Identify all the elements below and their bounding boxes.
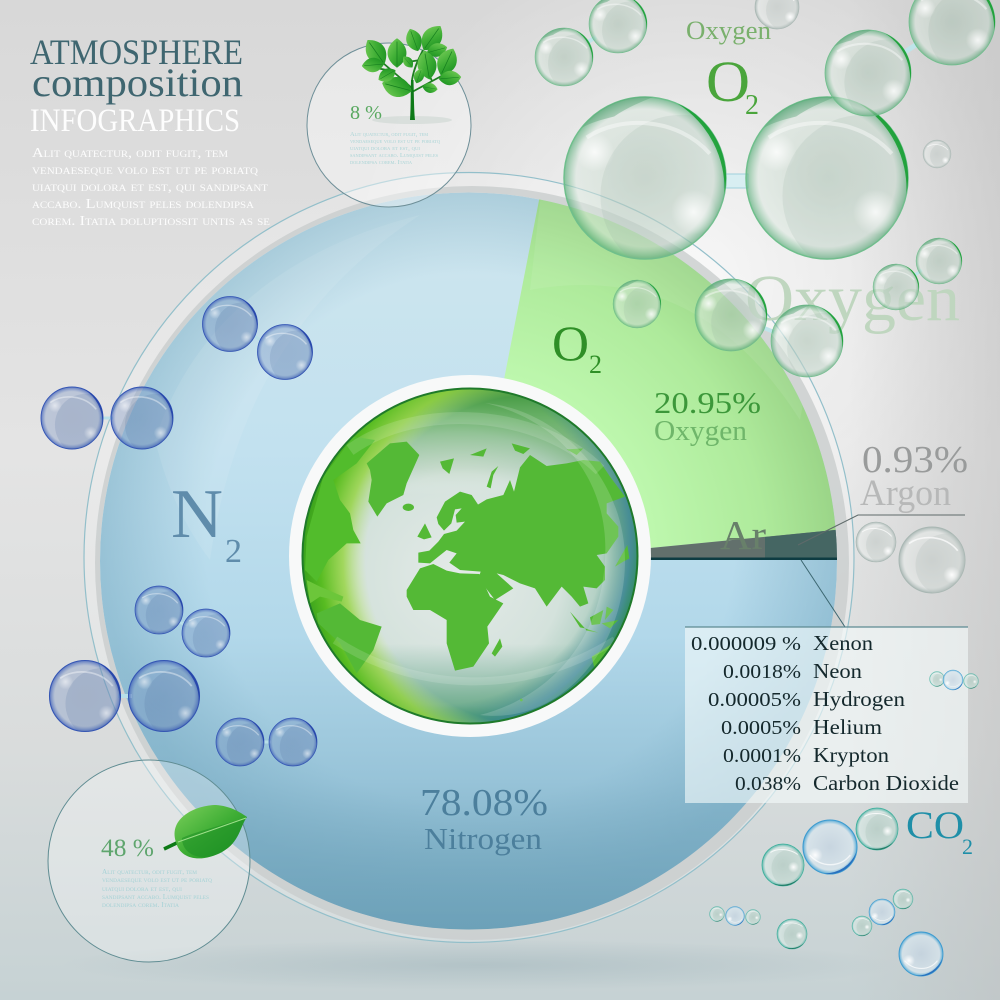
- bubbles: oxygen molecule top right: [825, 0, 1000, 125]
- Australia: [592, 644, 612, 667]
- label: top Oxygen heading: Oxygen: [686, 16, 771, 45]
- pie segment: oxygen 20.95%: [504, 200, 836, 548]
- intro paragraph: corem. Itatia doluptiossit untis as se: [32, 213, 271, 228]
- gas names: [813, 631, 959, 795]
- Greenland: [367, 442, 419, 517]
- small text: Alit quatectur, odit fugit, tem: [350, 132, 428, 138]
- bubbles: oxygen molecule top left: [535, 0, 660, 92]
- bubbles: small trio right: [852, 889, 916, 936]
- white globe ring: [289, 375, 651, 737]
- label: top O2: O: [706, 49, 750, 114]
- Svalbard: [440, 458, 454, 474]
- value: 48%: 48 %: [101, 835, 154, 862]
- bubbles: oxygen molecule right: [873, 238, 972, 315]
- grey band: [95, 186, 849, 940]
- bubbles: carbon dioxide molecule: [762, 808, 903, 887]
- intro paragraph: accabo. Lumquist peles dolendipsa: [32, 196, 255, 211]
- Central America: [307, 580, 343, 603]
- percentages: 0.0001%: [723, 745, 801, 767]
- intro paragraph: Alit quatectur, odit fugit, tem: [32, 145, 228, 160]
- table: trace gases: [685, 627, 968, 803]
- small text: [102, 869, 212, 909]
- bubbles: small trio lower: [710, 906, 762, 926]
- small text: [350, 132, 440, 166]
- South America: [317, 603, 382, 673]
- small text: sandipsant accabo. Lumquist peles: [350, 153, 438, 159]
- percentages: 0.0005%: [721, 717, 801, 739]
- intro paragraph: [32, 145, 271, 228]
- title line 2: composition: [32, 60, 243, 105]
- globe rim: [302, 388, 638, 724]
- gas names: Carbon Dioxide: [813, 771, 959, 795]
- Japan: [615, 545, 629, 567]
- small text: dolendipsa corem. Itatia: [102, 902, 179, 909]
- label: 0.93% Argon: Argon: [860, 473, 951, 514]
- small text: sandipsant accabo. Lumquist peles: [102, 894, 209, 901]
- title block: [30, 32, 271, 228]
- bubbles: nitrogen molecule 4: [50, 660, 215, 739]
- small text: uiatqui dolora et est, qui: [350, 146, 421, 152]
- pie segment: argon 0.93%: [640, 530, 840, 560]
- percentages: 0.038%: [735, 773, 801, 795]
- label: Ar: Ar: [720, 512, 766, 558]
- Africa: [407, 564, 503, 671]
- bubble: small grey: [923, 140, 957, 169]
- label: 20.95% Oxygen: 20.95%: [654, 385, 761, 420]
- North America: [305, 437, 375, 582]
- bubble: green in wedge: [613, 280, 672, 333]
- bubbles: nitrogen molecule 3: [135, 586, 241, 662]
- label: wedge O2: O: [552, 315, 589, 371]
- argon leader line: [798, 515, 965, 545]
- label: N2: [171, 476, 242, 570]
- icon: tree: [360, 21, 462, 124]
- Novaya Zemlya: [487, 466, 498, 488]
- bubbles: large oxygen molecule: [564, 97, 944, 277]
- outer thin ring: [84, 172, 854, 942]
- label: 0.93% Argon: 0.93%: [862, 439, 968, 481]
- gas names: Krypton: [813, 743, 890, 767]
- bubble: single blue: [899, 932, 943, 976]
- Madagascar: [492, 638, 502, 657]
- panel: atmosphere pie chart: [84, 150, 854, 942]
- heading: oxygen ghost word: Oxygen: [745, 262, 960, 335]
- bubbles: nitrogen molecule 5: [216, 718, 328, 771]
- gas names: Helium: [813, 715, 882, 739]
- percentages: 0.0018%: [723, 661, 801, 683]
- small text: uiatqui dolora et est, qui: [102, 886, 182, 893]
- bubble: single teal: [777, 919, 811, 950]
- label: CO2: [906, 804, 973, 859]
- bubbles: nitrogen molecule 2: [41, 387, 187, 456]
- gas names: Xenon: [813, 631, 874, 655]
- percentages: [691, 633, 801, 795]
- gas names: Neon: [813, 659, 863, 683]
- label: 20.95% Oxygen: [654, 385, 761, 447]
- bubbles: nitrogen molecule 1: [202, 296, 325, 386]
- label: 78.08% Nitrogen: [420, 782, 548, 856]
- label: CO2: CO: [906, 804, 964, 847]
- small text: dolendipsa corem. Itatia: [350, 160, 412, 166]
- pie edge shading: [100, 192, 837, 930]
- bubbles: oxygen molecule on pie edge: [695, 279, 859, 385]
- label: 20.95% Oxygen: Oxygen: [654, 416, 747, 447]
- percentages: 0.00005%: [708, 689, 801, 711]
- small text: Alit quatectur, odit fugit, tem: [102, 869, 198, 876]
- UK and Ireland: [417, 523, 432, 539]
- label: 0.93% Argon: [860, 439, 968, 514]
- continents: [305, 437, 629, 701]
- panel: tree 8% callout: [307, 21, 471, 207]
- bubbles: argon: [856, 522, 978, 596]
- bubble: top centre: [755, 0, 808, 31]
- globe: [289, 375, 651, 737]
- label: 78.08% Nitrogen: 78.08%: [420, 782, 548, 824]
- intro paragraph: vendaeseque volo est ut pe poriatq: [32, 162, 259, 177]
- icon: leaf: [164, 805, 247, 858]
- label: N2: N: [171, 476, 223, 553]
- small text: vendaeseque volo est ut pe poriatq: [102, 877, 212, 884]
- title line 1: ATMOSPHERE: [30, 32, 243, 72]
- gas names: Hydrogen: [813, 687, 906, 711]
- percentages: 0.000009 %: [691, 633, 801, 655]
- intro paragraph: uiatqui dolora et est, qui sandipsant: [32, 179, 269, 194]
- label: N2: 2: [225, 533, 242, 570]
- title line 3: INFOGRAPHICS: [30, 103, 240, 139]
- label: wedge O2: 2: [589, 350, 602, 379]
- label: 78.08% Nitrogen: Nitrogen: [424, 821, 543, 856]
- Iceland: [403, 504, 414, 511]
- panel: leaf 48% callout: [48, 760, 250, 962]
- label: top O2: 2: [745, 90, 759, 121]
- Eurasia: [418, 455, 625, 607]
- bubbles: tiny trio in table: [930, 670, 980, 690]
- label: wedge O2: [552, 315, 602, 379]
- value: 8%: 8 %: [350, 102, 382, 124]
- glass arcs: [335, 403, 625, 716]
- label: CO2: 2: [962, 834, 973, 859]
- pie segment: nitrogen 78.08%: [100, 192, 837, 930]
- small text: vendaeseque volo est ut pe poriatq: [350, 139, 440, 145]
- Southeast Asia islands: [570, 612, 585, 628]
- trace gases leader line: [801, 560, 845, 627]
